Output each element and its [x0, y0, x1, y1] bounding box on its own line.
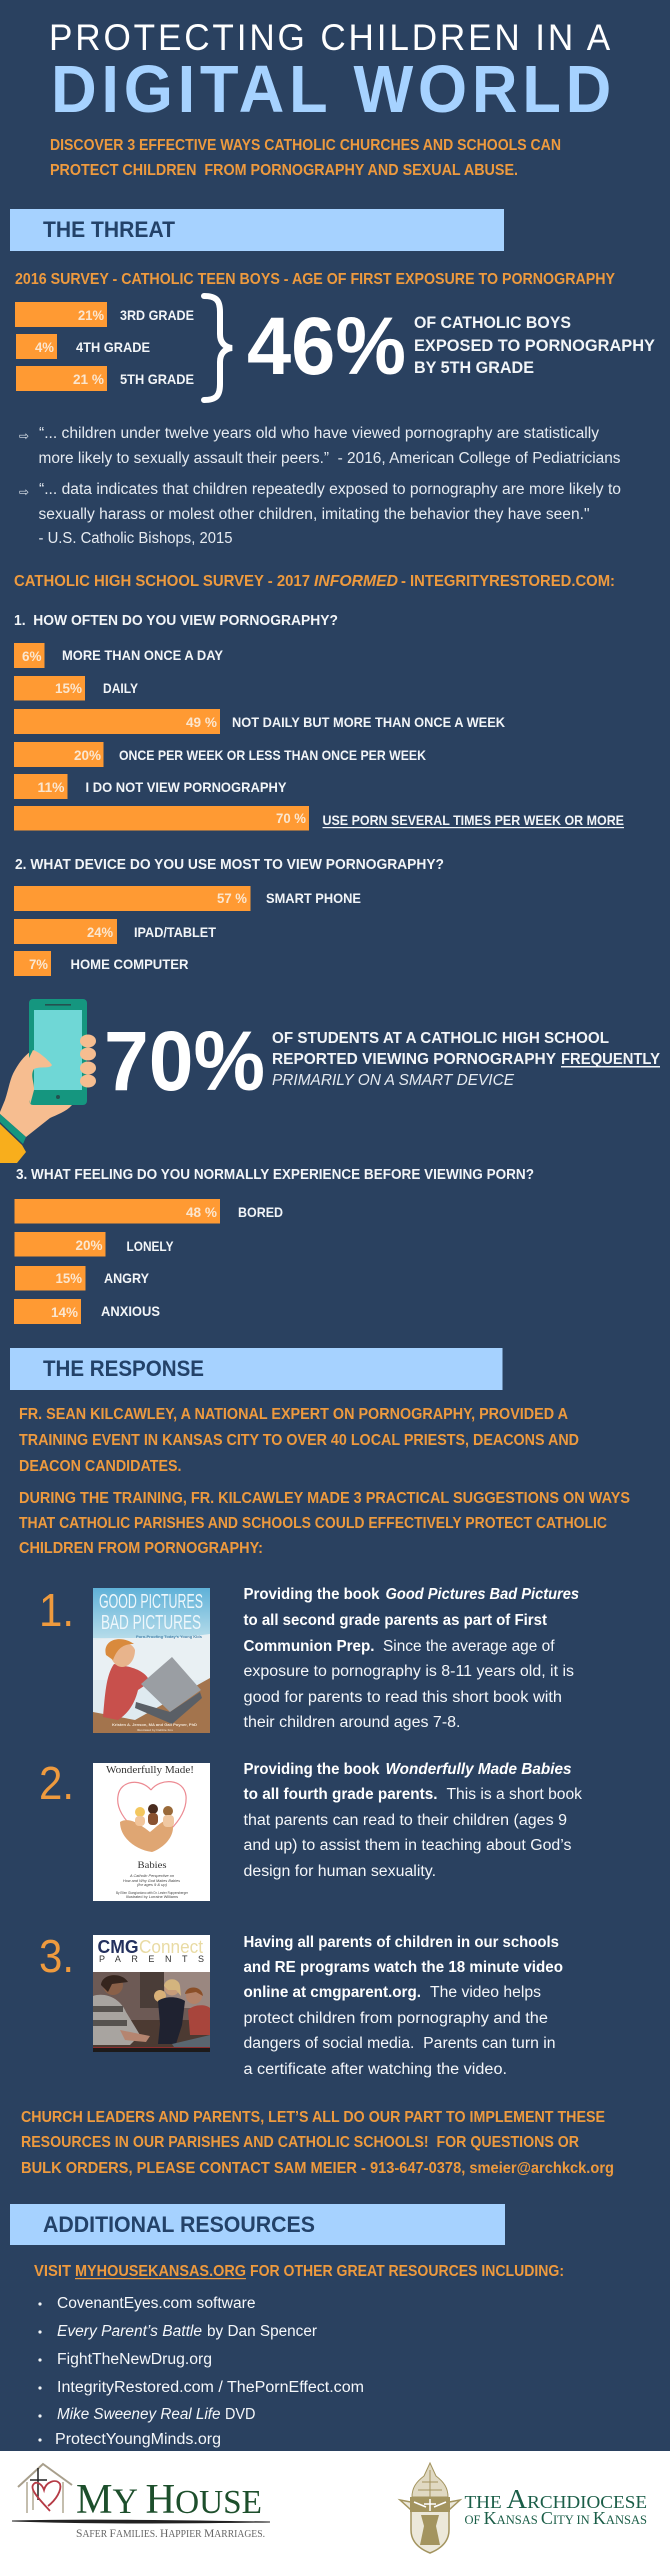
quote: U.S. Catholic Bishops: - U.S. Catholic Bishops, 2015	[38, 530, 232, 547]
bar: do not view: I DO NOT VIEW PORNOGRAPHY	[86, 779, 287, 795]
bar: lonely	[14, 1232, 174, 1256]
text: step 2: This is a short book	[446, 1786, 582, 1803]
bar: smart phone: 57 %	[217, 890, 248, 906]
bar chart: age of first exposure	[15, 302, 194, 391]
bar: 3rd grade	[15, 302, 194, 327]
book cover: Good Pictures Bad Pictures	[93, 1588, 210, 1733]
text: step 2: to all fourth grade parents.	[244, 1786, 438, 1803]
book cover: Good Pictures Bad Pictures: GOOD PICTURES	[99, 1591, 203, 1613]
quote: U.S. Catholic Bishops	[19, 481, 621, 547]
book cover: Wonderfully Made Babies	[93, 1763, 210, 1901]
quote: U.S. Catholic Bishops: “... data indicates that children repeatedly exposed to pornography are more likely to	[39, 481, 621, 498]
resource list: FightTheNewDrug.org	[57, 2351, 212, 2368]
bar: angry: ANGRY	[104, 1270, 150, 1286]
bar: 5th grade	[16, 366, 194, 391]
stat: 70%: 70%	[104, 1014, 265, 1108]
stat caption: EXPOSED TO PORNOGRAPHY	[414, 337, 655, 355]
high school survey heading	[14, 573, 615, 590]
quote: American College of Pediatricians: ⇨	[19, 429, 29, 443]
resource list: ProtectYoungMinds.org	[55, 2431, 221, 2448]
bar: 4th grade: 4TH GRADE	[76, 339, 150, 355]
bar: daily	[14, 676, 139, 700]
text: step 2: Wonderfully Made Babies	[386, 1761, 572, 1778]
bar: lonely: LONELY	[126, 1238, 174, 1254]
stat caption: REPORTED VIEWING PORNOGRAPHY	[272, 1051, 557, 1068]
bar: not daily	[14, 709, 505, 734]
bar: more than once a day: MORE THAN ONCE A DAY	[62, 647, 224, 663]
book cover: Wonderfully Made Babies: (for ages 9 & up)	[137, 1883, 167, 1887]
text: training event	[19, 1406, 579, 1475]
text: practical suggestions	[19, 1490, 630, 1557]
resources intro: VISIT	[34, 2263, 72, 2280]
logo: Archdiocese of Kansas City in Kansas: OF KANSAS CITY IN KANSAS	[464, 2508, 647, 2528]
text: practical suggestions: THAT CATHOLIC PARISHES AND SCHOOLS COULD EFFECTIVELY PROTECT CATHOLIC	[19, 1515, 607, 1532]
text: training event: DEACON CANDIDATES.	[19, 1458, 182, 1475]
bar: once per week: ONCE PER WEEK OR LESS THAN ONCE PER WEEK	[119, 747, 426, 763]
title	[49, 17, 616, 127]
heading: the threat: THE THREAT	[43, 217, 176, 242]
bar chart: feeling	[14, 1199, 283, 1324]
bar: 4th grade: 4%	[35, 339, 55, 355]
text: step 2: and up) to assist them in teaching about God’s	[244, 1837, 572, 1854]
logo: My House	[12, 2464, 270, 2540]
logo: Archdiocese of Kansas City in Kansas: THE ARCHDIOCESE	[464, 2484, 647, 2514]
bar: more than once a day	[14, 643, 224, 668]
bar: daily: DAILY	[103, 680, 139, 696]
stat caption: PRIMARILY ON A SMART DEVICE	[272, 1072, 515, 1089]
resource list	[38, 2295, 364, 2448]
heading: additional resources	[10, 2204, 505, 2245]
callout: call to action: BULK ORDERS, PLEASE CONTACT SAM MEIER - 913-647-0378, smeier@archkck.org	[21, 2160, 614, 2177]
text: step 1: Good Pictures Bad Pictures	[386, 1586, 579, 1603]
text: step 1: exposure to pornography is 8-11 years old, it is	[244, 1663, 574, 1680]
bar: bored: 48 %	[186, 1204, 218, 1220]
text: step 1: Communion Prep.	[244, 1638, 374, 1655]
text: step 2: that parents can read to their children (ages 9	[244, 1812, 567, 1829]
bar: do not view	[14, 774, 287, 799]
stat caption: OF STUDENTS AT A CATHOLIC HIGH SCHOOL	[272, 1030, 609, 1047]
book cover: Wonderfully Made Babies: Wonderfully Made!	[106, 1765, 194, 1776]
bar: bored: BORED	[238, 1204, 283, 1220]
bar: several times per week	[14, 806, 624, 830]
logo: Archdiocese of Kansas City in Kansas	[400, 2463, 647, 2553]
stat caption: FREQUENTLY	[561, 1051, 661, 1068]
book cover: Good Pictures Bad Pictures: Porn-Proofing Today's Young Kids	[136, 1634, 203, 1639]
text: step 3: online at cmgparent.org.	[244, 1984, 421, 2001]
book cover: Wonderfully Made Babies: Babies	[138, 1861, 167, 1871]
bar: home computer	[14, 951, 188, 976]
logo: My House: MY HOUSE	[76, 2477, 262, 2523]
subtitle	[50, 137, 561, 179]
book cover: Wonderfully Made Babies: A Catholic Perspective on	[129, 1874, 174, 1878]
brace	[204, 296, 232, 400]
video thumbnail: CMG Connect Parents: Connect	[139, 1937, 203, 1957]
book cover: Good Pictures Bad Pictures: BAD PICTURES	[101, 1612, 201, 1634]
text: step 1: good for parents to read this short book with	[244, 1689, 562, 1706]
bar: 4th grade	[16, 334, 150, 359]
high school survey heading: INFORMED	[314, 573, 398, 590]
bar: angry	[15, 1266, 150, 1290]
book cover: Wonderfully Made Babies: Illustrated by Lorraine Williams	[126, 1895, 178, 1899]
bar: angry: 15%	[56, 1270, 83, 1286]
text: step 3: The video helps	[430, 1984, 541, 2001]
quote: U.S. Catholic Bishops: ⇨	[19, 485, 29, 499]
resource list: Every Parent’s Battle	[57, 2323, 202, 2340]
bar: 3rd grade: 3RD GRADE	[120, 307, 194, 323]
book cover: Good Pictures Bad Pictures: Kristen A. Jenson, MA and Gail Poyner, PhD	[112, 1722, 197, 1727]
resource list: CovenantEyes.com software	[57, 2295, 256, 2312]
resource list: Mike Sweeney Real Life	[57, 2406, 221, 2423]
bar chart: device	[14, 886, 361, 976]
resource list: IntegrityRestored.com / ThePornEffect.com	[57, 2379, 364, 2396]
text: step 1	[244, 1586, 579, 1731]
bar: anxious: ANXIOUS	[101, 1303, 160, 1319]
title: DIGITAL WORLD	[51, 52, 616, 127]
bar: once per week: 20%	[74, 747, 102, 763]
text: practical suggestions: DURING THE TRAINING, FR. KILCAWLEY MADE 3 PRACTICAL SUGGESTIONS ON WAYS	[19, 1490, 630, 1507]
bar: daily: 15%	[55, 680, 83, 696]
text: step 2: design for human sexuality.	[244, 1863, 436, 1880]
callout: call to action: CHURCH LEADERS AND PARENTS, LET’S ALL DO OUR PART TO IMPLEMENT THESE	[21, 2109, 605, 2126]
number 3: 3.	[39, 1930, 74, 1982]
bar: 5th grade: 5TH GRADE	[120, 371, 194, 387]
bar: once per week	[14, 742, 426, 767]
bar: anxious: 14%	[51, 1304, 79, 1320]
text: step 3: and RE programs watch the 18 minute video	[244, 1959, 563, 1976]
heading: additional resources: ADDITIONAL RESOURCES	[43, 2212, 315, 2237]
bar: do not view: 11%	[38, 779, 65, 795]
bar: bored	[14, 1199, 283, 1224]
text: training event: FR. SEAN KILCAWLEY, A NATIONAL EXPERT ON PORNOGRAPHY, PROVIDED A	[19, 1406, 568, 1423]
survey heading: 2016 SURVEY - CATHOLIC TEEN BOYS - AGE OF FIRST EXPOSURE TO PORNOGRAPHY	[15, 271, 616, 288]
text: step 2: Providing the book	[244, 1761, 380, 1778]
bar: more than once a day: 6%	[22, 648, 42, 664]
subtitle: PROTECT CHILDREN FROM PORNOGRAPHY AND SEXUAL ABUSE.	[50, 162, 518, 179]
video thumbnail: CMG Connect Parents	[93, 1935, 210, 2052]
bar: not daily: 49 %	[186, 714, 218, 730]
number 1: 1.	[39, 1584, 74, 1636]
question 2: 2. WHAT DEVICE DO YOU USE MOST TO VIEW PORNOGRAPHY?	[15, 857, 444, 873]
bar: smart phone	[14, 886, 361, 911]
bar: tablet: IPAD/TABLET	[134, 924, 216, 940]
stat caption: BY 5TH GRADE	[414, 359, 534, 377]
stat caption	[272, 1030, 661, 1089]
book cover: Good Pictures Bad Pictures: Illustrated by Debbie Fox	[137, 1728, 174, 1732]
bar: anxious	[14, 1299, 160, 1324]
video thumbnail: CMG Connect Parents: PARENTS	[99, 1954, 204, 1964]
stat caption	[414, 314, 655, 377]
bar: 3rd grade: 21%	[78, 307, 105, 323]
heading: the response	[10, 1348, 502, 1390]
resources intro	[34, 2263, 564, 2280]
book cover: Wonderfully Made Babies: By Ellen Giangiordano with Dr. Lester Ruppersberger	[116, 1891, 189, 1895]
high school survey heading: - INTEGRITYRESTORED.COM:	[401, 573, 615, 590]
footer	[0, 2451, 670, 2560]
text: step 3: dangers of social media. Parents can turn in	[244, 2035, 556, 2052]
subtitle: DISCOVER 3 EFFECTIVE WAYS CATHOLIC CHURCHES AND SCHOOLS CAN	[50, 137, 561, 154]
text: step 2	[244, 1761, 582, 1880]
quote: American College of Pediatricians: more likely to sexually assault their peers.” - 2016, American College of Pediatricians	[38, 450, 621, 467]
text: training event: TRAINING EVENT IN KANSAS CITY TO OVER 40 LOCAL PRIESTS, DEACONS AND	[19, 1432, 579, 1449]
text: step 3	[244, 1934, 563, 2078]
heading: the response: THE RESPONSE	[43, 1356, 204, 1381]
bar: not daily: NOT DAILY BUT MORE THAN ONCE A WEEK	[232, 714, 505, 730]
resource list: DVD	[225, 2406, 256, 2423]
title: PROTECTING CHILDREN IN A	[49, 17, 613, 58]
question 1: 1. HOW OFTEN DO YOU VIEW PORNOGRAPHY?	[14, 613, 338, 629]
text: step 3: protect children from pornography and the	[244, 2010, 548, 2027]
text: step 3: Having all parents of children in our schools	[244, 1934, 559, 1951]
text: step 1: Providing the book	[244, 1586, 380, 1603]
bar: lonely: 20%	[76, 1237, 103, 1253]
bar: several times per week: 70 %	[276, 810, 307, 826]
resources intro: FOR OTHER GREAT RESOURCES INCLUDING:	[250, 2263, 564, 2280]
video thumbnail: CMG Connect Parents: CMG	[98, 1937, 138, 1957]
bar: home computer: 7%	[29, 956, 49, 972]
quote: U.S. Catholic Bishops: sexually harass or molest other children, imitating the behavior they have seen."	[38, 506, 590, 523]
bar: tablet	[14, 919, 216, 944]
text: step 1: to all second grade parents as part of First	[244, 1612, 547, 1629]
bar: home computer: HOME COMPUTER	[70, 956, 188, 972]
icon: hand holding phone	[0, 999, 96, 1163]
resources intro: MYHOUSEKANSAS.ORG	[75, 2263, 246, 2280]
text: step 1: Since the average age of	[383, 1638, 555, 1655]
stat: 46%: 46%	[247, 301, 406, 392]
number 2: 2.	[39, 1757, 74, 1809]
bar: tablet: 24%	[87, 924, 114, 940]
high school survey heading: CATHOLIC HIGH SCHOOL SURVEY - 2017	[14, 573, 310, 590]
callout: call to action: RESOURCES IN OUR PARISHES AND CATHOLIC SCHOOLS! FOR QUESTIONS OR	[21, 2134, 579, 2151]
text: step 3: a certificate after watching the video.	[244, 2061, 507, 2078]
book cover: Wonderfully Made Babies: How and Why God Makes Babies	[123, 1879, 180, 1883]
resource list: by Dan Spencer	[207, 2323, 317, 2340]
callout: call to action	[21, 2109, 614, 2177]
bar: 5th grade: 21 %	[73, 371, 105, 387]
text: step 1: their children around ages 7-8.	[244, 1714, 460, 1731]
bar: smart phone: SMART PHONE	[266, 890, 361, 906]
stat caption: OF CATHOLIC BOYS	[414, 314, 571, 332]
question 3: 3. WHAT FEELING DO YOU NORMALLY EXPERIENCE BEFORE VIEWING PORN?	[16, 1167, 534, 1183]
logo: My House: SAFER FAMILIES. HAPPIER MARRIAGES.	[76, 2526, 265, 2540]
quote: American College of Pediatricians	[19, 425, 621, 467]
quote: American College of Pediatricians: “... children under twelve years old who have viewed pornography are statistically	[39, 425, 599, 442]
text: practical suggestions: CHILDREN FROM PORNOGRAPHY:	[19, 1540, 263, 1557]
bar chart: how often	[14, 643, 624, 830]
heading: the threat	[10, 209, 504, 251]
bar: several times per week: USE PORN SEVERAL TIMES PER WEEK OR MORE	[322, 812, 624, 828]
